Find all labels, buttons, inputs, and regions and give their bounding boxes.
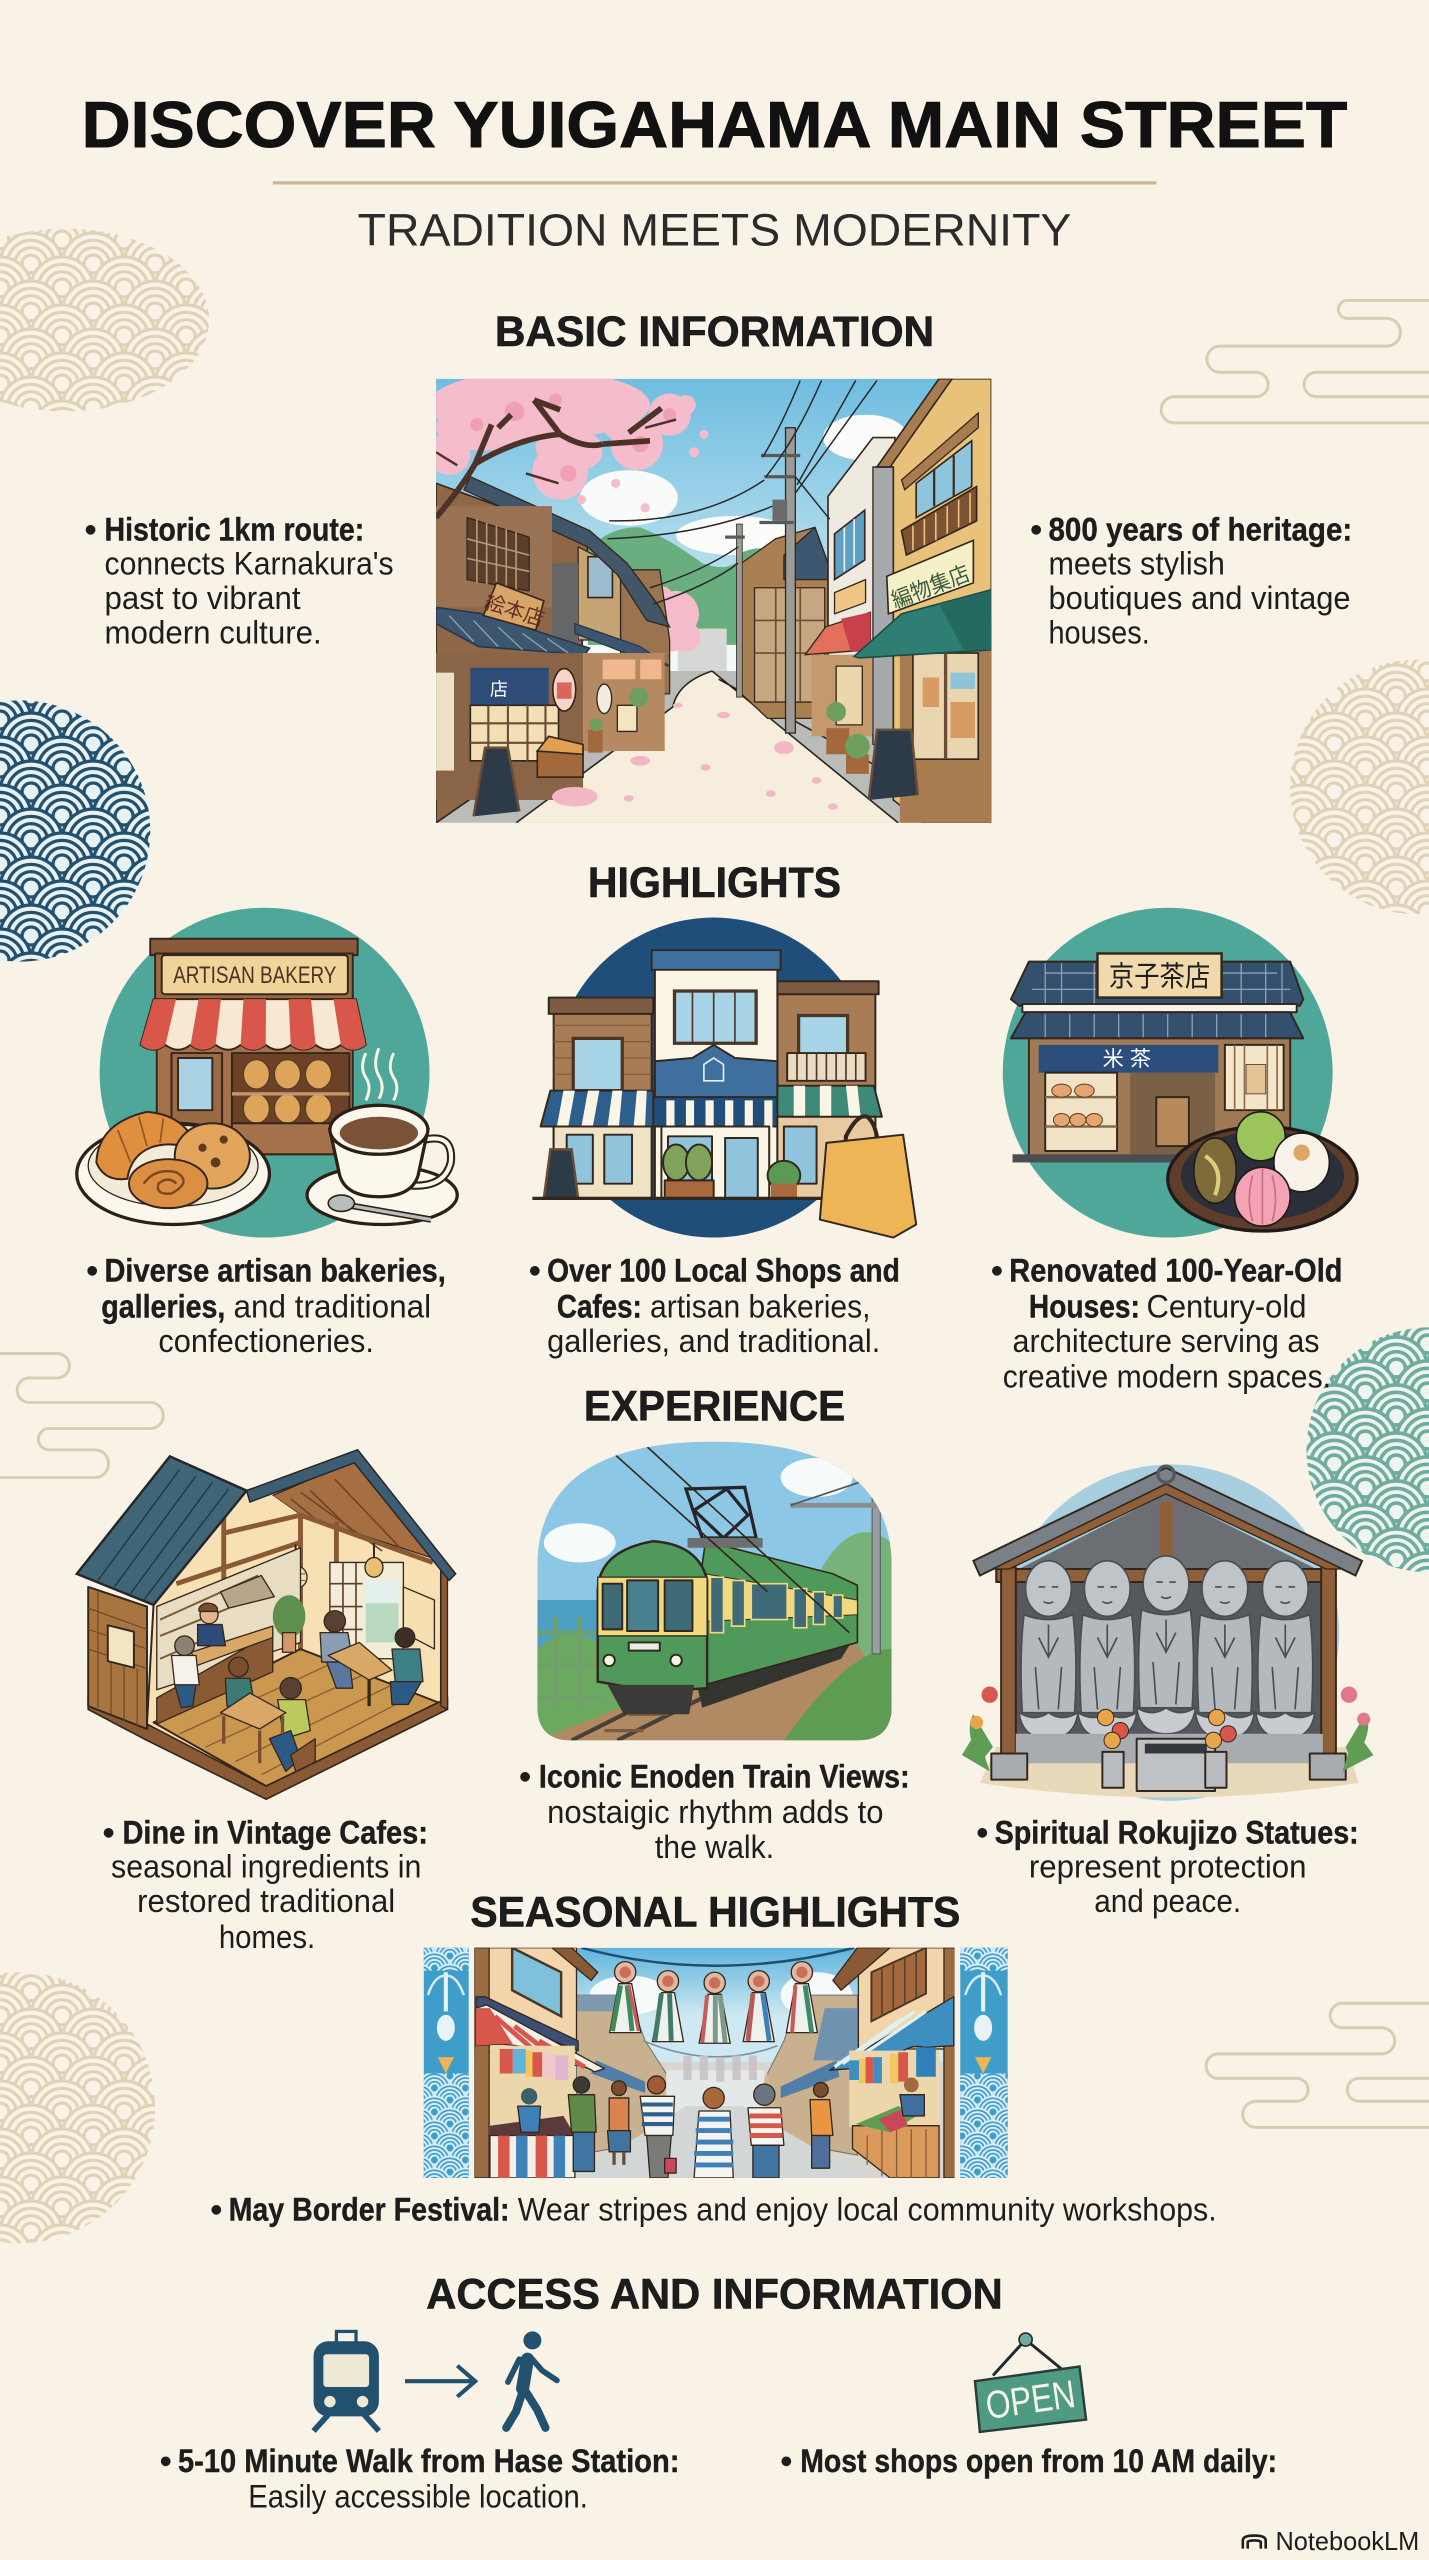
shopping bag	[843, 1116, 879, 1185]
illustration: Rokujizo shrine	[962, 1464, 1373, 1801]
street	[631, 2106, 811, 2148]
text block: heritage: houses.	[1048, 613, 1150, 650]
text block: Rokujizo statues: •	[977, 1813, 988, 1850]
interior walls	[147, 1456, 441, 1793]
text block: festival: Wear stripes and enjoy local community workshops.	[518, 2190, 1217, 2227]
fallen petals	[552, 703, 838, 810]
gable boards	[273, 1460, 436, 1559]
text block: local shops: •	[529, 1252, 541, 1289]
text block: vintage cafes: seasonal ingredients in	[111, 1848, 421, 1885]
floor	[154, 1649, 439, 1786]
text block: historic route	[85, 510, 394, 650]
heading: seasonal highlights: SEASONAL HIGHLIGHTS	[470, 1889, 960, 1936]
text block: renovated houses	[991, 1252, 1342, 1395]
text block: historic route: modern culture.	[105, 613, 322, 650]
illustration: vintage cafe cutaway	[77, 1450, 456, 1799]
text block: train views: the walk.	[655, 1828, 774, 1865]
text block: vintage cafes	[103, 1813, 428, 1955]
text block: historic route: connects Karnakura's	[105, 545, 394, 582]
text block: festival: May Border Festival:	[229, 2190, 510, 2227]
road and sidewalks	[437, 671, 922, 823]
outer side wall	[88, 1587, 147, 1729]
NotebookLM logo: NotebookLM	[1275, 2526, 1419, 2556]
text block: walk from station: 5-10 Minute Walk from Hase Station:	[178, 2442, 679, 2479]
text block: heritage: meets stylish	[1048, 545, 1225, 582]
text block: renovated houses: creative modern spaces.	[1003, 1358, 1331, 1395]
roofs	[247, 1450, 456, 1580]
text block: local shops: artisan bakeries,	[650, 1288, 870, 1325]
decor: bottom-left beige wave pattern	[0, 1972, 155, 2243]
text block: renovated houses: Renovated 100-Year-Old	[1009, 1252, 1342, 1289]
icon: open sign	[975, 2333, 1086, 2432]
text block: historic route: past to vibrant	[105, 579, 300, 616]
text block: Rokujizo statues: Spiritual Rokujizo Statues:	[995, 1813, 1359, 1850]
text block: heritage: •	[1031, 510, 1042, 547]
cherry tree	[428, 371, 708, 512]
left house row	[436, 483, 588, 823]
text block: vintage cafes: homes.	[219, 1918, 315, 1955]
illustration: Enoden train	[537, 1442, 892, 1740]
illustration: artisan bakery	[77, 908, 457, 1238]
text block: Rokujizo statues: and peace.	[1094, 1882, 1241, 1919]
text block: bakeries: Diverse artisan bakeries,	[105, 1252, 446, 1289]
text block: renovated houses: Century-old	[1146, 1288, 1307, 1325]
right awning	[830, 1997, 954, 2070]
text block: walk from station	[160, 2442, 679, 2515]
icon: walking person	[506, 2331, 557, 2428]
text block: Rokujizo statues	[977, 1813, 1359, 1919]
text block: train views: •	[519, 1758, 531, 1795]
barista and customer	[171, 1603, 225, 1708]
text block: heritage	[1031, 510, 1352, 650]
text block: train views: Iconic Enoden Train Views:	[539, 1758, 910, 1795]
text block: walk from station: Easily accessible location.	[248, 2478, 588, 2515]
floor plank edge and base	[88, 1698, 447, 1799]
plant	[273, 1595, 305, 1638]
right building	[858, 1948, 954, 2049]
window with view	[330, 1562, 403, 1659]
far buildings	[678, 628, 727, 671]
text block: vintage cafes: Dine in Vintage Cafes:	[122, 1813, 428, 1850]
heading: highlights: HIGHLIGHTS	[588, 859, 841, 906]
left building	[474, 1948, 576, 2052]
left stall	[490, 2116, 575, 2136]
illustration: cherry blossom street	[428, 371, 991, 823]
illustration: local shops	[532, 918, 916, 1238]
title divider	[273, 181, 1156, 184]
illustration: tea shop and sweets: 京子茶店	[1109, 961, 1210, 993]
text block: bakeries: galleries,	[101, 1288, 225, 1325]
right table party	[320, 1611, 423, 1706]
decor: left cloud lines	[0, 1353, 163, 1478]
text block: festival	[211, 2190, 1217, 2227]
illustration: cherry blossom street: 店	[490, 680, 508, 700]
illustration: May festival street	[424, 1948, 1008, 2178]
crowd	[568, 2076, 833, 2178]
text block: bakeries: •	[87, 1252, 98, 1289]
pole and wires	[786, 428, 795, 733]
text block: renovated houses: architecture serving as	[1013, 1322, 1320, 1359]
decor: top-left wave pattern	[0, 229, 209, 411]
white building	[828, 438, 895, 735]
side panel: left	[424, 1948, 469, 2178]
distant tree	[662, 586, 700, 652]
beams	[176, 1515, 433, 1657]
text block: opening hours: •	[781, 2442, 792, 2479]
text block: local shops: Cafes:	[557, 1288, 642, 1325]
icon: open sign: OPEN	[983, 2373, 1078, 2428]
decor: navy wave pattern	[0, 700, 150, 962]
text block: historic route: Historic 1km route:	[105, 510, 364, 547]
heading: experience: EXPERIENCE	[584, 1382, 845, 1429]
illustration: cherry blossom street: 絵本店	[482, 590, 547, 631]
text block: bakeries: and traditional	[234, 1288, 431, 1325]
text block: historic route: •	[85, 510, 96, 547]
text block: festival: •	[211, 2190, 222, 2227]
text block: local shops	[529, 1252, 900, 1359]
right stall	[853, 2126, 939, 2178]
text block: local shops: Over 100 Local Shops and	[547, 1252, 900, 1289]
text block: train views	[519, 1758, 910, 1865]
title: DISCOVER YUIGAHAMA MAIN STREET	[82, 88, 1347, 161]
decor: bottom-right cloud lines	[1206, 2003, 1429, 2127]
heading: access and information: ACCESS AND INFORMATION	[426, 2271, 1003, 2318]
illustration: cherry blossom street: 編物集店	[888, 561, 973, 613]
illustration: tea shop and sweets	[1003, 908, 1357, 1238]
wooden sign	[483, 583, 544, 630]
text block: vintage cafes: •	[103, 1813, 114, 1850]
text block: opening hours: Most shops open from 10 AM daily:	[800, 2442, 1277, 2479]
plate of wagashi	[1168, 1112, 1357, 1231]
left awning	[476, 2005, 604, 2072]
text block: Rokujizo statues: represent protection	[1029, 1848, 1307, 1885]
icon: arrow	[405, 2366, 475, 2397]
text block: walk from station: •	[160, 2442, 171, 2479]
text block: heritage: 800 years of heritage:	[1048, 510, 1352, 547]
tan building	[877, 379, 991, 823]
coffee cup	[307, 1105, 457, 1224]
text block: bakeries	[87, 1252, 446, 1359]
text block: heritage: boutiques and vintage	[1048, 579, 1351, 616]
decor: top-right cloud lines	[1161, 300, 1429, 423]
illustration: tea shop and sweets: 米 茶	[1103, 1047, 1151, 1071]
decor: right beige wave pattern	[1290, 660, 1429, 914]
subtitle: TRADITION MEETS MODERNITY	[358, 205, 1071, 256]
tile roof	[436, 607, 590, 655]
right row of houses	[741, 527, 828, 718]
icon: train	[314, 2331, 379, 2431]
background buildings	[576, 1995, 666, 2155]
text block: train views: nostaigic rhythm adds to	[547, 1793, 884, 1830]
strings	[581, 1948, 854, 1966]
illustration: artisan bakery: ARTISAN BAKERY	[173, 962, 336, 989]
side panel: right	[960, 1948, 1008, 2178]
blackboard	[869, 730, 918, 800]
text block: local shops: galleries, and traditional.	[547, 1322, 880, 1359]
text block: vintage cafes: restored traditional	[137, 1882, 395, 1919]
kitchen	[157, 1548, 300, 1690]
text block: renovated houses: Houses:	[1029, 1288, 1140, 1325]
tassels	[610, 1962, 641, 2033]
counter	[157, 1633, 273, 1724]
left table party	[220, 1657, 315, 1776]
text block: renovated houses: •	[991, 1252, 1003, 1289]
lamps	[296, 1543, 374, 1567]
mountain	[588, 527, 762, 645]
shop front	[436, 653, 583, 800]
text block: bakeries: confectioneries.	[158, 1322, 374, 1359]
decor: right teal wave pattern	[1307, 1327, 1429, 1572]
heading: basic information: BASIC INFORMATION	[495, 308, 934, 355]
plate of pastries	[77, 1112, 269, 1224]
